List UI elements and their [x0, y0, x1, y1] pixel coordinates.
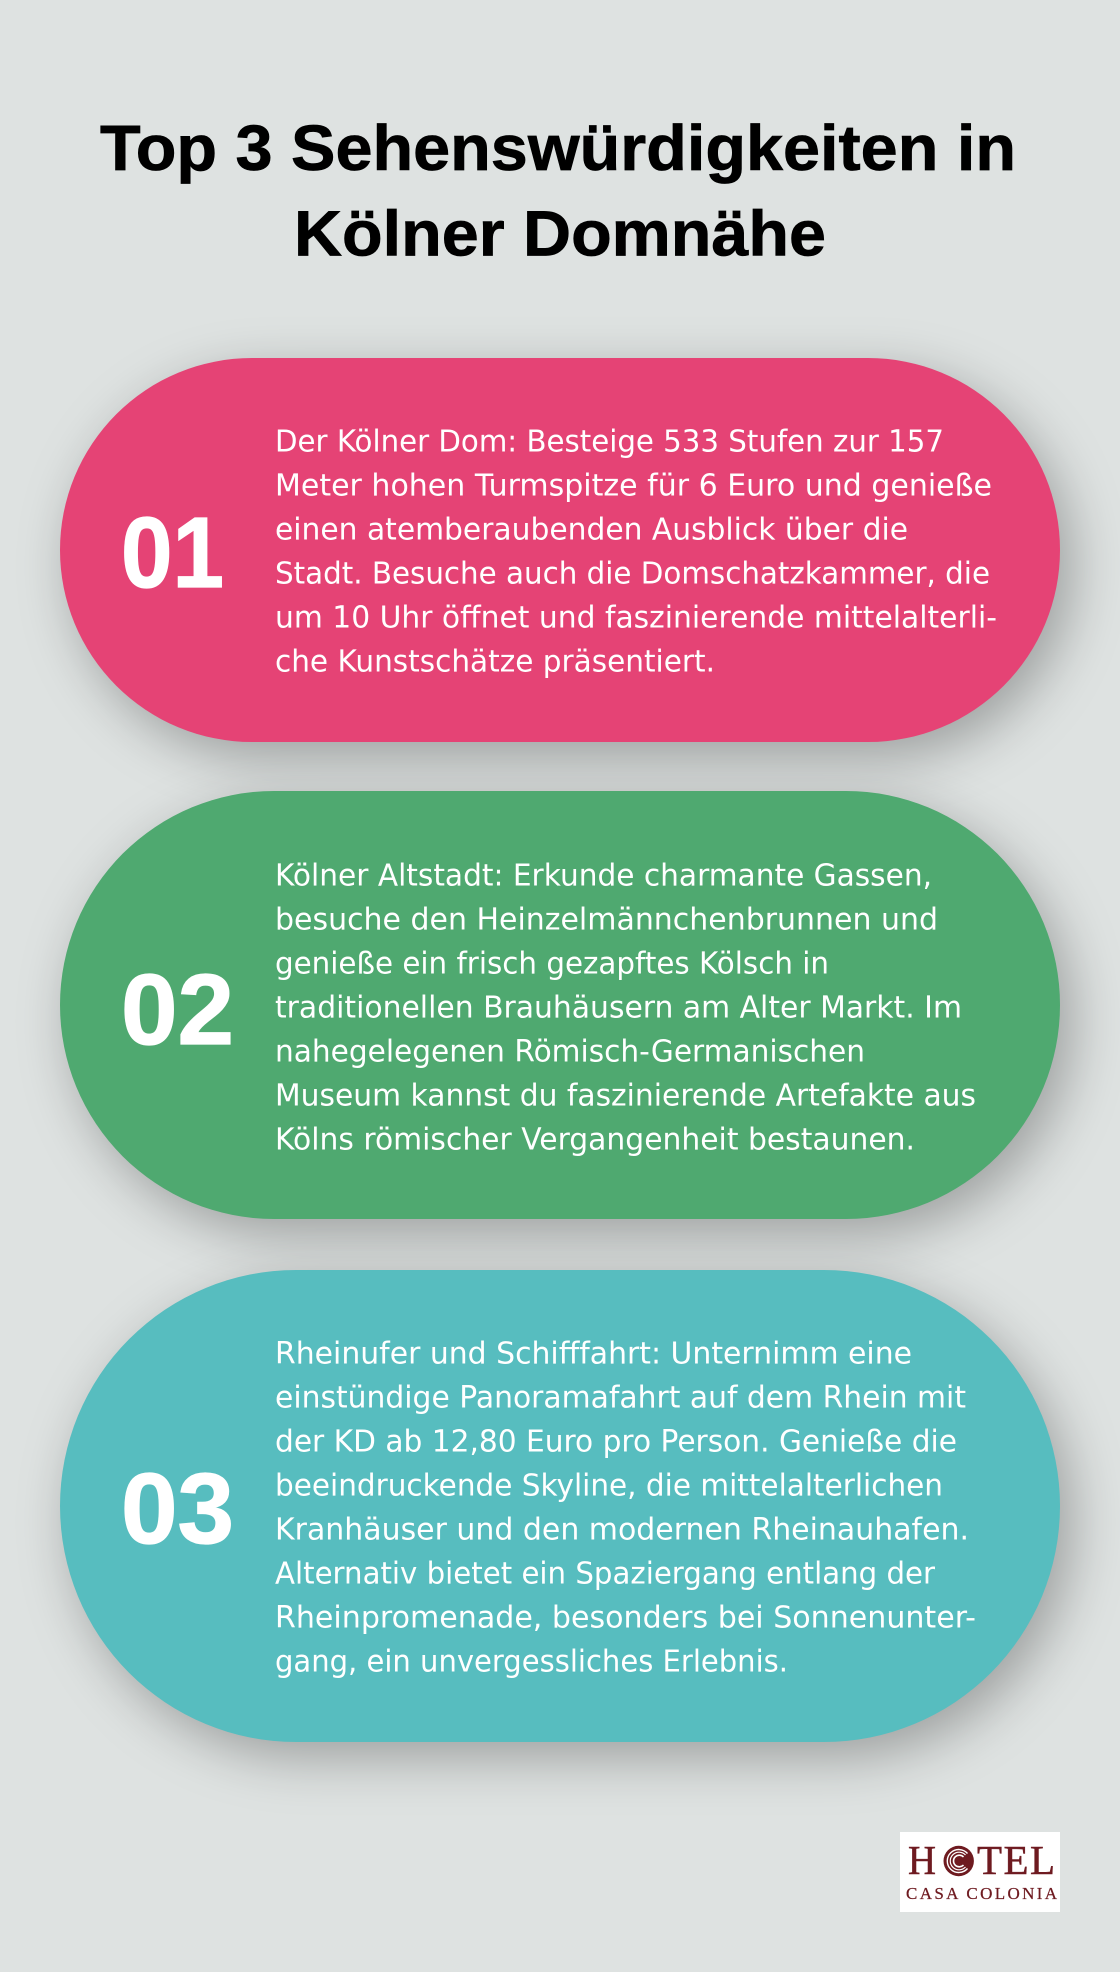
text block: Rheinufer und Schifffahrt: Rheinpromenade, besonders bei Sonnenunter- [275, 1600, 976, 1636]
title: Kölner Domnähe [294, 198, 826, 270]
logo: Hotel Casa Colonia: TEL [977, 1837, 1055, 1883]
icon: logo ring O [944, 1846, 974, 1876]
text block: Kölner Altstadt: Kölns römischer Vergangenheit bestaunen. [275, 1122, 915, 1158]
text block: Kölner Altstadt: genieße ein frisch gezapftes Kölsch in [275, 946, 829, 982]
text block: Rheinufer und Schifffahrt: einstündige Panoramafahrt auf dem Rhein mit [275, 1380, 966, 1416]
text block: Kölner Dom: Der Kölner Dom: Besteige 533 Stufen zur 157 [275, 424, 944, 460]
pill background: teal [60, 1270, 1060, 1742]
text block: Kölner Altstadt: Kölner Altstadt: Erkunde charmante Gassen, [275, 858, 932, 894]
panel: Kölner Altstadt [60, 791, 1060, 1219]
number 01: 01 [121, 497, 224, 609]
text block: Kölner Dom: che Kunstschätze präsentiert. [275, 644, 715, 680]
text block: Rheinufer und Schifffahrt: gang, ein unvergessliches Erlebnis. [275, 1644, 788, 1680]
text block: Kölner Dom: einen atemberaubenden Ausblick über die [275, 512, 908, 548]
text block: Kölner Altstadt: besuche den Heinzelmännchenbrunnen und [275, 902, 938, 938]
text block: Kölner Altstadt: nahegelegenen Römisch-Germanischen [275, 1034, 865, 1070]
text block: Rheinufer und Schifffahrt: Kranhäuser und den modernen Rheinauhafen. [275, 1512, 969, 1548]
number 02: 02 [121, 954, 234, 1066]
panel: Kölner Dom [60, 358, 1060, 742]
pill background: green [60, 791, 1060, 1219]
text block: Kölner Dom: Meter hohen Turmspitze für 6 Euro und genieße [275, 468, 992, 504]
text block: Rheinufer und Schifffahrt: Rheinufer und Schifffahrt: Unternimm eine [275, 1336, 912, 1372]
text block: Rheinufer und Schifffahrt [275, 1336, 976, 1680]
text block: Rheinufer und Schifffahrt: der KD ab 12,80 Euro pro Person. Genieße die [275, 1424, 957, 1460]
text block: Kölner Altstadt [275, 858, 976, 1158]
logo: Hotel Casa Colonia [900, 1832, 1060, 1912]
text block: Kölner Altstadt: traditionellen Brauhäusern am Alter Markt. Im [275, 990, 962, 1026]
logo: Hotel Casa Colonia: H [908, 1837, 936, 1883]
logo: Hotel Casa Colonia: CASA COLONIA [906, 1884, 1058, 1903]
text block: Kölner Dom: Stadt. Besuche auch die Domschatzkammer, die [275, 556, 990, 592]
text block: Kölner Altstadt: Museum kannst du faszinierende Artefakte aus [275, 1078, 976, 1114]
text block: Rheinufer und Schifffahrt: beeindruckende Skyline, die mittelalterlichen [275, 1468, 943, 1504]
number 03: 03 [121, 1453, 234, 1565]
text block: Rheinufer und Schifffahrt: Alternativ bietet ein Spaziergang entlang der [275, 1556, 935, 1592]
text block: Kölner Dom [275, 424, 997, 680]
title [100, 112, 1016, 270]
panel: Rheinufer und Schifffahrt [60, 1270, 1060, 1742]
text block: Kölner Dom: um 10 Uhr öffnet und faszinierende mittelalterli- [275, 600, 997, 636]
title: Top 3 Sehenswürdigkeiten in [100, 112, 1016, 184]
pill background: pink [60, 358, 1060, 742]
